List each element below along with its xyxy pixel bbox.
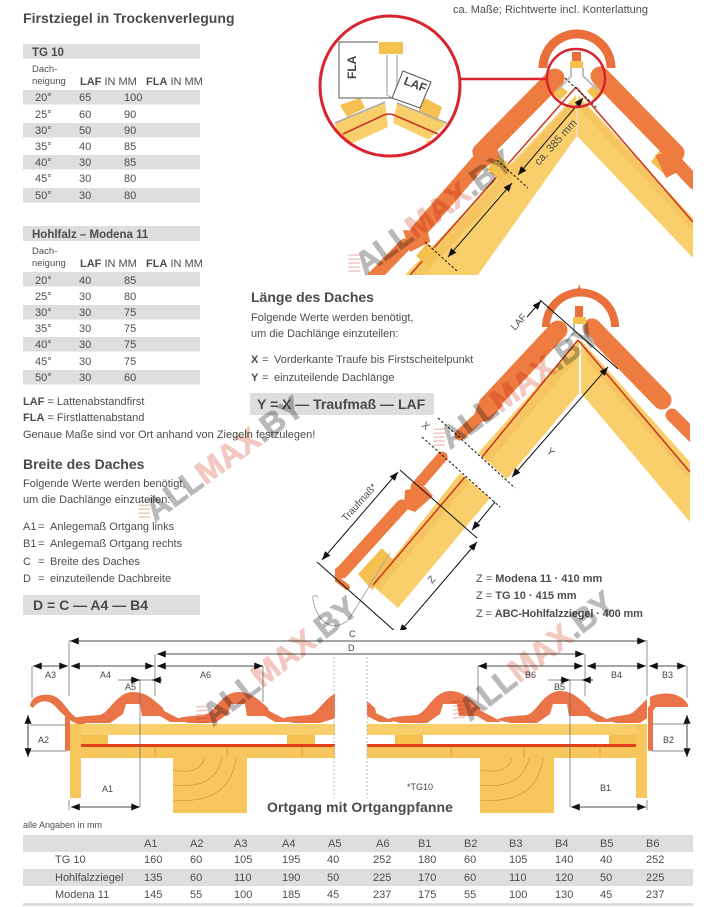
table: Hohlfalz – Modena 11: 30° (35, 307, 52, 319)
dimension labels: B6 (525, 670, 536, 680)
section: Breite des Daches: Anlegemaß Ortgang rechts (50, 538, 183, 550)
legend text: LAF and FLA: Genaue Maße sind vor Ort anhand von Ziegeln festzulegen! (23, 429, 315, 441)
table: verge dimensions: 140 (555, 854, 573, 866)
magnifier content: LAF (402, 74, 429, 95)
section: Breite des Daches: = (38, 573, 44, 585)
table: verge dimensions: 110 (234, 872, 252, 884)
table: verge dimensions: 225 (373, 872, 391, 884)
dimension labels: Y (544, 446, 557, 459)
watermarks: ALLMAX.BY: ALLMAX.BY (138, 389, 310, 528)
table: TG 10: 30 (79, 157, 91, 169)
watermarks: ALLMAX.BY: ALLMAX.BY (195, 589, 364, 733)
dimension labels: LAF (509, 312, 530, 333)
dimension labels: B4 (611, 670, 622, 680)
section: Breite des Daches: A1 (23, 521, 36, 533)
table: TG 10: 40° (35, 157, 52, 169)
connector line (459, 78, 548, 80)
dimension lines (30, 640, 687, 810)
table: Hohlfalz – Modena 11: 80 (124, 291, 136, 303)
dimension labels: A6 (200, 670, 211, 680)
table: Hohlfalz – Modena 11: 75 (124, 323, 136, 335)
diagram: roof ridge top (373, 28, 695, 278)
table: verge dimensions: 130 (555, 889, 573, 901)
table: verge dimensions: 145 (144, 889, 162, 901)
table: verge dimensions: 110 (509, 872, 527, 884)
dimension labels: A5 (125, 682, 136, 692)
table: TG 10: 65 (79, 92, 91, 104)
table: TG 10: 80 (124, 190, 136, 202)
section: Länge des Daches: Folgende Werte werden benötigt, (251, 312, 413, 324)
roof tiles (373, 76, 695, 278)
dimension labels: Traufmaß* (340, 482, 380, 524)
tile dimension notes: Z = TG 10 · 415 mm (476, 590, 577, 602)
table: Hohlfalz – Modena 11: 35° (35, 323, 52, 335)
section: Breite des Daches: = (38, 556, 44, 568)
section: Breite des Daches: um die Dachlänge einzuteilen: (23, 494, 170, 506)
table: verge dimensions: B6 (646, 838, 659, 850)
section: Breite des Daches: B1 (23, 538, 36, 550)
section: Breite des Daches: C (23, 556, 31, 568)
table: TG 10: FLA IN MM (146, 76, 203, 88)
section: Breite des Daches (23, 456, 200, 615)
table: verge dimensions: B4 (555, 838, 568, 850)
table: verge dimensions: 60 (190, 872, 202, 884)
left tiles (30, 692, 343, 751)
section: Länge des Daches: = (262, 372, 268, 384)
table: verge dimensions: 60 (190, 854, 202, 866)
rafters (358, 340, 690, 608)
note: all dimensions in mm: alle Angaben in mm (23, 820, 102, 830)
table: verge dimensions: 185 (282, 889, 300, 901)
dimension: ca. 385 mm: ca. 385 mm (532, 117, 580, 168)
table: verge dimensions: 180 (418, 854, 436, 866)
table: TG 10: Dach- (32, 64, 57, 75)
diagram: verge cross-section (28, 629, 688, 813)
dimension labels (38, 629, 674, 794)
table: TG 10: neigung (32, 76, 66, 87)
table: Hohlfalz – Modena 11: 60 (124, 372, 136, 384)
table: Hohlfalz – Modena 11: 40 (79, 275, 91, 287)
table: verge dimensions: 190 (282, 872, 300, 884)
dimension labels: X (419, 420, 432, 433)
table: verge dimensions: A3 (234, 838, 247, 850)
table: verge dimensions: 237 (373, 889, 391, 901)
table: TG 10: 30 (79, 190, 91, 202)
table: Hohlfalz – Modena 11: 30 (79, 356, 91, 368)
table: Hohlfalz – Modena 11: 75 (124, 307, 136, 319)
table: verge dimensions: 105 (234, 854, 252, 866)
table: TG 10: 80 (124, 173, 136, 185)
section: Breite des Daches: Anlegemaß Ortgang links (50, 521, 175, 533)
table: verge dimensions: 55 (464, 889, 476, 901)
table: TG 10: 20° (35, 92, 52, 104)
tile dimension notes: Z = ABC-Hohlfalzziegel · 400 mm (476, 608, 643, 620)
dimension labels: B1 (600, 783, 611, 793)
barge tile right (650, 693, 688, 712)
centre line (334, 657, 367, 798)
table: verge dimensions: 105 (509, 854, 527, 866)
section: Länge des Daches: Y (251, 372, 259, 384)
table: verge dimensions: B5 (600, 838, 613, 850)
table: TG 10: 40 (79, 141, 91, 153)
dimension labels: B5 (554, 682, 565, 692)
table: verge dimensions: TG 10 (55, 854, 86, 866)
table: TG 10: 25° (35, 109, 52, 121)
table: verge dimensions: 60 (464, 872, 476, 884)
roof tiles (338, 328, 695, 587)
table: verge dimensions: 225 (646, 872, 664, 884)
table: verge dimensions: 135 (144, 872, 162, 884)
table: verge dimensions: 40 (600, 854, 612, 866)
table: verge dimensions: 252 (646, 854, 664, 866)
table: Hohlfalz – Modena 11: 20° (35, 275, 52, 287)
section: Länge des Daches: = (262, 354, 268, 366)
table: verge dimensions: 100 (509, 889, 527, 901)
table: Hohlfalz – Modena 11: LAF IN MM (80, 258, 137, 270)
table: verge dimensions: B3 (509, 838, 522, 850)
table: verge dimensions: B1 (418, 838, 431, 850)
section: Länge des Daches: einzuteilende Dachlänge (274, 372, 394, 384)
dimension labels: Z (426, 574, 438, 586)
note: approximate dimensions: ca. Maße; Richtwerte incl. Konterlattung (453, 4, 648, 16)
table: verge dimensions: 160 (144, 854, 162, 866)
barge tile left (30, 695, 86, 724)
section: Länge des Daches: Länge des Daches (251, 289, 374, 305)
table: Hohlfalz – Modena 11: Hohlfalz – Modena 11 (32, 229, 149, 241)
legend text: LAF and FLA: FLA = Firstlattenabstand (23, 412, 144, 424)
dimension labels: A3 (45, 670, 56, 680)
table: Hohlfalz – Modena 11: 25° (35, 291, 52, 303)
dimension labels: C (349, 629, 356, 639)
magnifier content (335, 42, 447, 145)
section: Länge des Daches: X (251, 354, 259, 366)
section: Länge des Daches: um die Dachlänge einzuteilen: (251, 328, 398, 340)
dimension labels: B3 (662, 670, 673, 680)
wire (313, 553, 390, 626)
table: TG 10: 50 (79, 125, 91, 137)
table: TG 10 (23, 44, 203, 202)
diagram: roof length section (313, 283, 695, 633)
table: Hohlfalz – Modena 11: 75 (124, 339, 136, 351)
dimension labels: A4 (100, 670, 111, 680)
battens (416, 84, 673, 266)
section: Breite des Daches: = (38, 521, 44, 533)
table: verge dimensions (23, 835, 693, 906)
table: Hohlfalz – Modena 11: 30 (79, 307, 91, 319)
table: TG 10: 35° (35, 141, 52, 153)
tile dimension notes: Z = Modena 11 · 410 mm (476, 573, 602, 585)
table: verge dimensions: 45 (327, 889, 339, 901)
table: verge dimensions: Modena 11 (55, 889, 109, 901)
table: verge dimensions: A6 (376, 838, 389, 850)
legend text: LAF and FLA (23, 396, 315, 441)
table: Hohlfalz – Modena 11: 40° (35, 339, 52, 351)
watermarks: ALLMAX.BY (129, 143, 621, 739)
section: Breite des Daches: Breite des Daches (23, 456, 145, 472)
dimension: ca. 385 mm (425, 78, 597, 272)
table: Hohlfalz – Modena 11: 30 (79, 339, 91, 351)
section: Breite des Daches: D (23, 573, 31, 585)
dimension labels: *TG10 (407, 782, 433, 792)
section: Breite des Daches: Breite des Daches (50, 556, 140, 568)
table: verge dimensions: 40 (327, 854, 339, 866)
dimension labels: B2 (663, 735, 674, 745)
table: Hohlfalz – Modena 11: Dach- (32, 246, 57, 257)
table: TG 10: 50° (35, 190, 52, 202)
table: TG 10: 45° (35, 173, 52, 185)
table: Hohlfalz – Modena 11 (23, 226, 203, 384)
ridge cap (543, 28, 611, 90)
table: verge dimensions: 45 (600, 889, 612, 901)
table: Hohlfalz – Modena 11: 45° (35, 356, 52, 368)
table: verge dimensions: B2 (464, 838, 477, 850)
table: verge dimensions: 252 (373, 854, 391, 866)
dimension labels: A2 (38, 735, 49, 745)
table: Hohlfalz – Modena 11: FLA IN MM (146, 258, 203, 270)
table: verge dimensions: Hohlfalzziegel (55, 872, 123, 884)
table: TG 10: 90 (124, 109, 136, 121)
table: verge dimensions: A5 (328, 838, 341, 850)
tile dimension notes (476, 573, 643, 620)
table: Hohlfalz – Modena 11: 50° (35, 372, 52, 384)
callout: magnified ridge detail (320, 16, 605, 156)
table: verge dimensions: 237 (646, 889, 664, 901)
table: verge dimensions: 55 (190, 889, 202, 901)
diagram title: Ortgang mit Ortgangpfanne: Ortgang mit Ortgangpfanne (267, 799, 453, 815)
section: Länge des Daches (250, 289, 473, 415)
watermarks: ALLMAX.BY: ALLMAX.BY (348, 143, 520, 282)
section: Breite des Daches: D = C — A4 — B4 (33, 597, 148, 613)
table: verge dimensions: 175 (418, 889, 436, 901)
table: TG 10: 30° (35, 125, 52, 137)
legend text: LAF and FLA: LAF = Lattenabstandfirst (23, 396, 144, 408)
timber structure (70, 724, 647, 813)
dimension labels: D (348, 643, 355, 653)
table: verge dimensions: A1 (144, 838, 157, 850)
dimension lines (317, 300, 618, 633)
table: verge dimensions: 50 (327, 872, 339, 884)
dimension labels (340, 312, 557, 586)
watermarks: ALLMAX.BY: ALLMAX.BY (452, 584, 621, 728)
ridge cap (546, 283, 615, 342)
table: TG 10: TG 10 (32, 47, 64, 59)
rafters (405, 87, 693, 275)
section: Länge des Daches: Y = X — Traufmaß — LAF (257, 396, 426, 412)
table: Hohlfalz – Modena 11: 75 (124, 356, 136, 368)
table: verge dimensions: 100 (234, 889, 252, 901)
table: verge dimensions: 195 (282, 854, 300, 866)
table: Hohlfalz – Modena 11: 30 (79, 323, 91, 335)
table: Hohlfalz – Modena 11: 85 (124, 275, 136, 287)
watermarks: ALLMAX.BY: ALLMAX.BY (433, 317, 605, 456)
table: verge dimensions: 50 (600, 872, 612, 884)
table: TG 10: 30 (79, 173, 91, 185)
table: Hohlfalz – Modena 11: 30 (79, 372, 91, 384)
table: verge dimensions: 120 (555, 872, 573, 884)
table: verge dimensions: 170 (418, 872, 436, 884)
table: TG 10: 85 (124, 157, 136, 169)
heading: Firstziegel in Trockenverlegung: Firstziegel in Trockenverlegung (23, 10, 235, 26)
right tiles (367, 691, 688, 751)
table: TG 10: 90 (124, 125, 136, 137)
table: TG 10: LAF IN MM (80, 76, 137, 88)
section: Länge des Daches: Vorderkante Traufe bis Firstscheitelpunkt (274, 354, 473, 366)
table: verge dimensions: A4 (282, 838, 295, 850)
table: TG 10: 60 (79, 109, 91, 121)
magnifier content: FLA (345, 55, 359, 79)
section: Breite des Daches: einzuteilende Dachbreite (50, 573, 171, 585)
table: TG 10: 85 (124, 141, 136, 153)
table: verge dimensions: A2 (190, 838, 203, 850)
table: Hohlfalz – Modena 11: 30 (79, 291, 91, 303)
dimension labels: A1 (102, 784, 113, 794)
table: Hohlfalz – Modena 11: neigung (32, 258, 66, 269)
section: Breite des Daches: = (38, 538, 44, 550)
table: TG 10: 100 (124, 92, 142, 104)
section: Breite des Daches: Folgende Werte werden benötigt, (23, 478, 185, 490)
table: verge dimensions: 60 (464, 854, 476, 866)
